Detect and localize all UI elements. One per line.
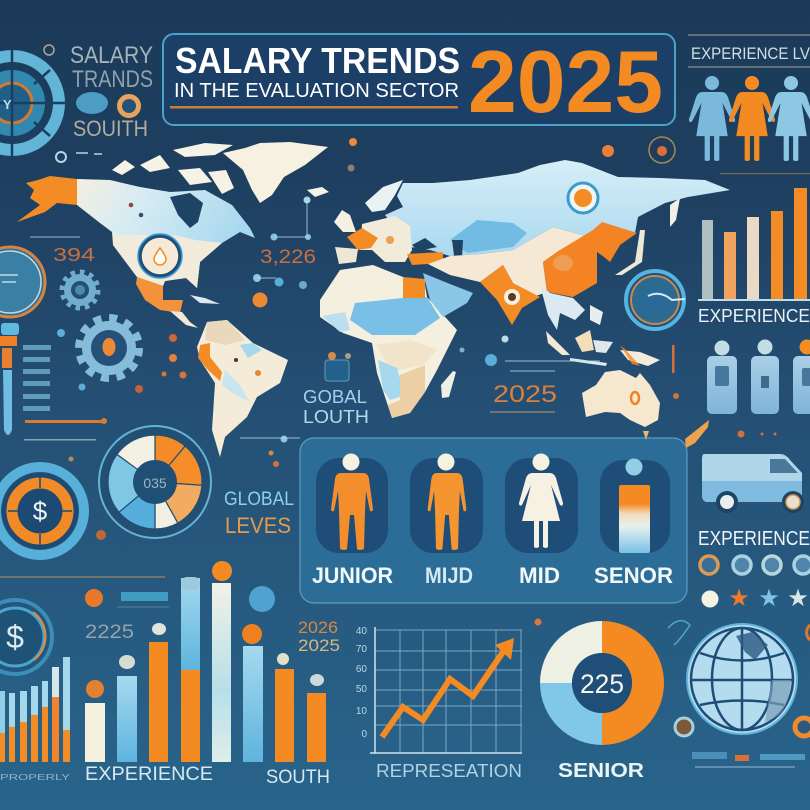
caribbean [190, 295, 220, 304]
north america [77, 179, 255, 288]
left heading: south: SOUITH [73, 116, 148, 141]
number: 394: 394 [53, 245, 95, 265]
western europe [360, 216, 412, 262]
label: 2225: 2225 [85, 622, 134, 643]
gear: small [62, 272, 98, 308]
iceland [307, 187, 329, 197]
alaska [17, 176, 77, 222]
map pin: europe [386, 236, 394, 244]
device 3 [793, 340, 810, 414]
person light blue [768, 76, 810, 161]
axis ticks: 10 [356, 706, 367, 717]
level card: mid 2 [505, 454, 578, 553]
level label: senior: SENOR [594, 563, 673, 588]
axis ticks: 50 [356, 684, 367, 695]
australia [582, 370, 660, 427]
subheading: IN THE EVALUATION SECTOR [174, 80, 459, 102]
central asia [450, 220, 527, 253]
level label: mid 1: MIJD [425, 563, 473, 588]
bar chart: top right [698, 188, 810, 301]
level card: senior [600, 458, 670, 553]
underline [170, 106, 458, 108]
icon: small badge [44, 45, 54, 55]
turkey [407, 252, 443, 265]
label: levels: LEVES [225, 513, 291, 538]
donut: left dollar [0, 467, 84, 555]
central america [170, 311, 198, 328]
icon: orange arc [807, 625, 810, 640]
united states [113, 235, 222, 288]
trend line [382, 649, 505, 737]
kamchatka [670, 198, 680, 227]
orange scale line [25, 418, 107, 424]
level card: mid 1 [410, 454, 483, 553]
madagascar [441, 371, 456, 398]
eurasia [385, 160, 730, 256]
dollar sign: $ [33, 496, 48, 526]
number: 2025 on map: 2025 [493, 381, 557, 408]
icon: magnifier [0, 247, 45, 435]
person orange [729, 76, 775, 161]
donut value: 225 [580, 669, 624, 699]
hudson bay [170, 193, 203, 228]
device 2 [751, 340, 779, 414]
label: south: SOUTH [266, 767, 330, 788]
icon: orange ring [795, 718, 810, 736]
map pin: australia [631, 392, 639, 404]
axis ticks [356, 626, 367, 740]
compass [626, 271, 685, 329]
left heading: trends: TRANDS [72, 66, 153, 93]
rating row: stars: ★ [728, 584, 750, 612]
map connector lines [30, 200, 600, 438]
africa [320, 265, 457, 418]
orange dot [534, 618, 542, 626]
experience heading top right [688, 35, 810, 67]
dollar medallion: bottom left [0, 600, 52, 674]
icon: ring [675, 718, 693, 736]
trend arrow [495, 638, 514, 660]
axis ticks: 60 [356, 664, 367, 675]
rating row: stars: ★ [758, 584, 780, 612]
left heading: salary: SALARY [70, 42, 153, 69]
globe [687, 624, 797, 734]
arctic islands [112, 143, 234, 194]
person blue [689, 76, 735, 161]
line chart [356, 626, 522, 753]
arabia [423, 273, 473, 317]
radial chart: top left [0, 50, 65, 156]
radial chart: top left: Y [3, 97, 12, 112]
china [543, 222, 637, 297]
label: global: GLOBAL [224, 489, 294, 510]
icon: top right ring [649, 137, 675, 163]
label: global: GOBAL [303, 387, 367, 407]
divider [720, 173, 810, 174]
donut centre label: 035 [143, 475, 167, 491]
heading: salary trends: SALARY TRENDS [175, 40, 460, 81]
map dots [57, 138, 614, 467]
south asia cream [428, 227, 600, 298]
malay peninsula and islands [546, 331, 570, 355]
dollar medallion: bottom left: $ [6, 619, 24, 655]
rating row: stars: ★ [787, 584, 809, 612]
devices [707, 340, 810, 414]
icon: blue blob [76, 92, 108, 114]
mini bar chart [0, 657, 70, 762]
label: south: LOUTH [303, 407, 369, 427]
donut: senior [540, 621, 664, 745]
egypt [403, 277, 425, 298]
bar top markers [85, 530, 324, 698]
label: 2025: 2025 [298, 636, 340, 655]
peru [198, 343, 222, 381]
black sea [412, 238, 437, 251]
japan [615, 230, 645, 275]
mexico [136, 277, 183, 313]
year: 2025 [468, 32, 663, 131]
small map marks [672, 345, 776, 438]
label: experience: EXPERIENCE [85, 764, 213, 785]
label: senior: SENIOR [558, 760, 645, 782]
map pin: russia [568, 183, 598, 213]
panel: levels background [300, 438, 687, 603]
label: 2026: 2026 [298, 618, 338, 637]
bar chart: experience [85, 578, 326, 762]
list lines [23, 345, 51, 411]
greenland [223, 142, 328, 203]
world map [17, 142, 730, 457]
southeast asia [540, 285, 585, 330]
rating row: circles [700, 556, 810, 574]
level label: mid 2: MID [519, 563, 560, 588]
icon: small target [56, 152, 66, 162]
rating row: stars [702, 584, 809, 612]
donut: middle [99, 426, 211, 538]
people: top right [689, 76, 810, 161]
map pin: usa [138, 234, 182, 278]
india [480, 265, 540, 325]
small calendar icon [325, 352, 351, 381]
level label: junior: JUNIOR [312, 563, 393, 588]
axis ticks: 70 [356, 644, 367, 655]
caspian sea [452, 240, 463, 263]
icon: swirl top of globe [668, 621, 690, 645]
british isles [334, 210, 356, 232]
map pin: china [553, 255, 573, 271]
number: 3,226: 3,226 [260, 247, 316, 268]
icon: van [702, 454, 804, 513]
south america [197, 320, 288, 457]
france [347, 228, 378, 250]
label: representation: REPRESEATION [376, 761, 522, 781]
level card: junior [316, 454, 388, 553]
spain [335, 247, 358, 264]
small lines [76, 153, 102, 154]
icon: orange ring [120, 96, 138, 116]
dashed divider [0, 576, 165, 578]
gear: large [79, 318, 139, 378]
panel: title [163, 32, 675, 131]
grey line [24, 439, 96, 440]
mini caption: PROPERLY [0, 773, 71, 782]
new zealand [685, 420, 709, 448]
tasmania [643, 431, 649, 440]
scandinavia [365, 180, 403, 212]
map pin: india [504, 289, 520, 305]
axis ticks: 0 [361, 729, 367, 740]
scribble strip [692, 752, 805, 768]
device 1 [707, 340, 737, 414]
axis ticks: 40 [356, 626, 367, 637]
